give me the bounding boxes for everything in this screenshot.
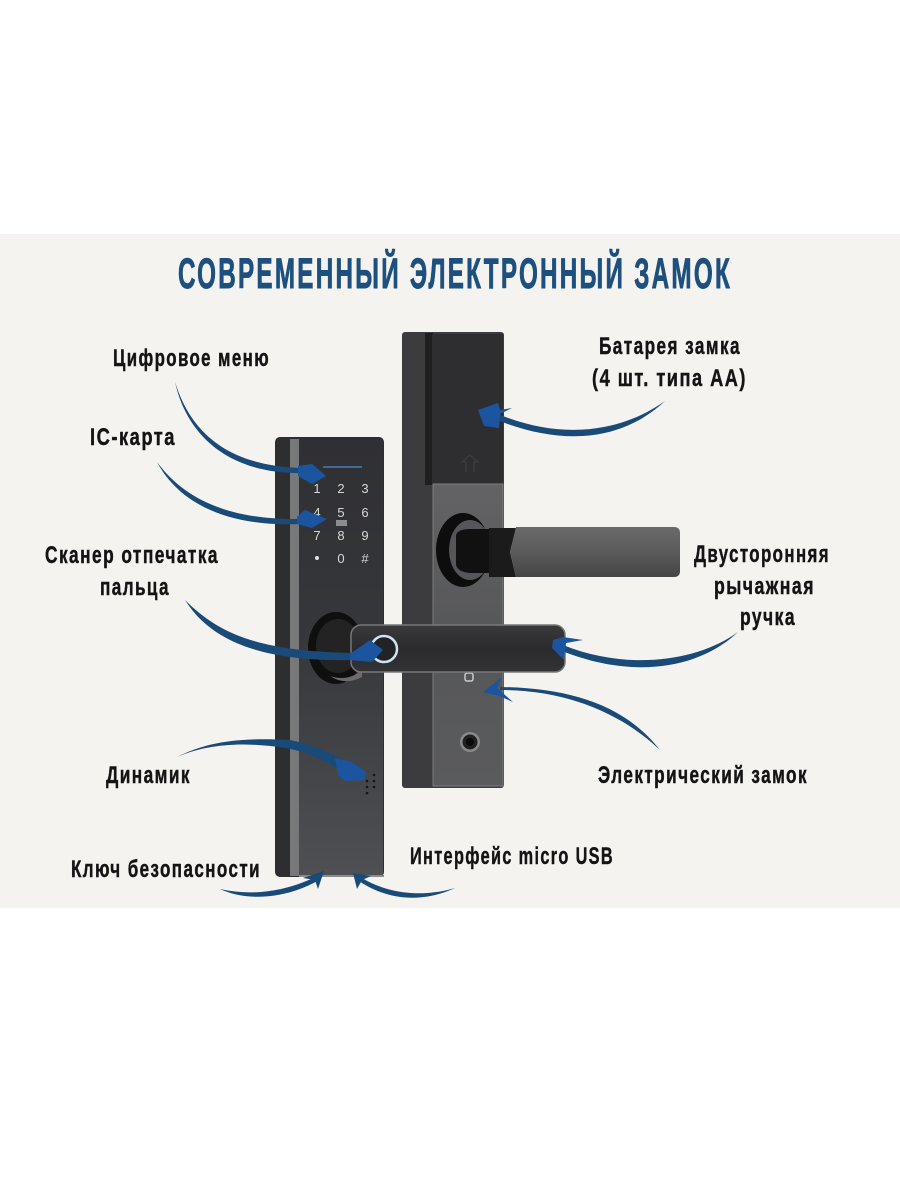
- background panel: [0, 234, 900, 908]
- lower plate: [433, 484, 503, 786]
- arrow: digital menu: [175, 382, 326, 484]
- upper lever handle: [436, 513, 680, 587]
- keypad: 5: [337, 505, 345, 520]
- front lock plate: [275, 437, 384, 877]
- label: battery: Батарея замка: [599, 333, 741, 360]
- arrow: IC card: [157, 462, 327, 528]
- label: micro USB: Интерфейс micro USB: [410, 843, 614, 870]
- arrow: fingerprint scanner: [185, 600, 383, 662]
- arrow: electric lock: [483, 677, 660, 750]
- label: fingerprint scanner: пальца: [100, 574, 170, 601]
- lower lever handle with fingerprint: [308, 612, 565, 684]
- label: digital menu: Цифровое меню: [113, 345, 270, 372]
- keypad: 8: [337, 528, 345, 543]
- label: electric lock: Электрический замок: [598, 762, 808, 789]
- keypad: 7: [313, 528, 321, 543]
- label: lever handle: [694, 541, 830, 631]
- battery cover: [432, 334, 503, 484]
- label: IC card: IC-карта: [90, 424, 176, 451]
- label: security key: Ключ безопасности: [71, 856, 261, 883]
- keypad: [313, 481, 369, 566]
- label: fingerprint scanner: Сканер отпечатка: [45, 542, 219, 569]
- fingerprint sensor ring: [371, 636, 397, 662]
- label: battery: [592, 333, 747, 392]
- arrow: micro USB: [353, 873, 455, 898]
- arrow: lever handle: [552, 632, 738, 667]
- keypad: 4: [313, 505, 321, 520]
- keypad: 1: [313, 481, 321, 496]
- label: speaker: Динамик: [106, 762, 191, 789]
- label: lever handle: рычажная: [714, 573, 815, 600]
- key cylinder: [460, 732, 480, 752]
- keypad: 3: [361, 481, 369, 496]
- home icon on cover: [462, 455, 478, 472]
- display line: [323, 466, 362, 468]
- keypad: 2: [337, 481, 345, 496]
- keypad: 6: [361, 505, 369, 520]
- back lock plate: [402, 332, 504, 788]
- card icon: [336, 520, 347, 526]
- arrow: battery: [478, 401, 665, 436]
- keypad: 9: [361, 528, 369, 543]
- arrow: security key: [220, 871, 324, 897]
- arrow: speaker: [177, 739, 366, 781]
- label: fingerprint scanner: [45, 542, 219, 601]
- keypad: 0: [337, 551, 345, 566]
- speaker holes: [366, 774, 375, 794]
- label: lever handle: ручка: [740, 604, 796, 631]
- keypad: #: [361, 551, 369, 566]
- label: battery: (4 шт. типа АА): [592, 365, 747, 392]
- small sensor: [465, 673, 473, 681]
- label: lever handle: Двусторонняя: [694, 541, 830, 568]
